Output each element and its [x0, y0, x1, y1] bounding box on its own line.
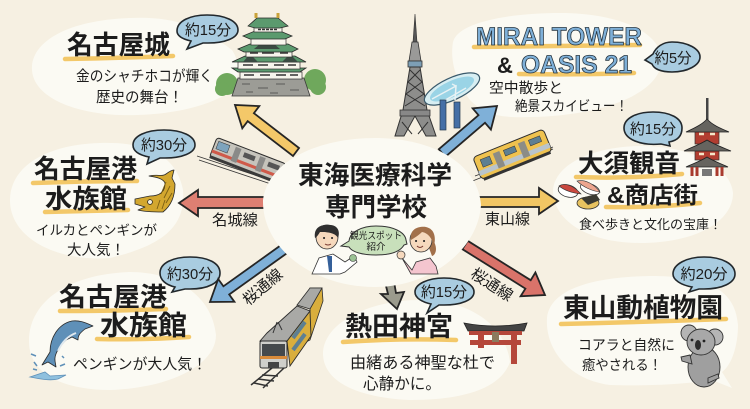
- arrow: to aquarium upper: [179, 190, 272, 216]
- arrow: to aquarium lower: [210, 243, 290, 302]
- text: Higashiyama description: [578, 337, 675, 373]
- heading: school name: 東海医療科学: [298, 161, 452, 190]
- heading: school name: [298, 161, 452, 222]
- callout: travel time 30 min: [133, 130, 195, 164]
- heading: Osu Kannon: 大須観音: [578, 150, 680, 178]
- icon: golden shachihoko: [135, 170, 175, 212]
- text: Higashiyama description: コアラと自然に: [578, 337, 675, 353]
- icon: Nagoya Castle: [215, 13, 326, 96]
- text: Higashiyama description: 癒やされる！: [582, 357, 662, 373]
- text: aquarium description: 大人気！: [67, 242, 125, 259]
- text: Atsuta description: [350, 354, 495, 393]
- callout: travel time 15 min Atsuta: 約15分: [421, 284, 467, 301]
- heading: Nagoya Port Aquarium lower: 名古屋港: [59, 282, 167, 312]
- blob: Osu background: [553, 146, 733, 243]
- text: Nagoya Castle description: [76, 68, 213, 106]
- blob: Higashiyama background: [547, 276, 738, 388]
- arrow: to Higashiyama: [462, 241, 545, 296]
- heading: Nagoya Port Aquarium: 名古屋港: [34, 154, 137, 184]
- text: aquarium description: イルカとペンギンが: [36, 223, 157, 238]
- heading: Nagoya Port Aquarium lower: 水族館: [100, 311, 187, 341]
- train: yellow subway train: [470, 129, 553, 182]
- text: Nagoya Castle description: 歴史の舞台！: [96, 89, 183, 106]
- text: Osu description: 食べ歩きと文化の宝庫！: [579, 217, 722, 232]
- callout: sightseeing spots intro: [341, 226, 407, 255]
- heading: Higashiyama Zoo: 東山動植物園: [563, 293, 723, 323]
- arrow: to Atsuta: [381, 276, 404, 309]
- callout: travel time 15 min: [177, 15, 238, 49]
- panel: Mirai Tower and Oasis 21: [395, 13, 700, 136]
- label: Sakura-dori line left: 桜通線: [239, 265, 287, 309]
- train: grey and red commuter train: [197, 137, 286, 187]
- panel: Nagoya Castle: [32, 13, 326, 115]
- blob: Nagoya Castle background: [32, 18, 238, 115]
- callout: travel time 5 min: 約5分: [654, 50, 692, 67]
- heading: Nagoya Port Aquarium lower: [59, 282, 189, 341]
- arrow: to Mirai Tower: [439, 106, 497, 157]
- text: Mirai description: [489, 80, 628, 114]
- callout: travel time 20 min: [673, 257, 735, 292]
- heading: school name: 専門学校: [325, 193, 427, 222]
- callout: travel time 15 min Osu: [624, 112, 682, 146]
- callout: travel time 15 min Osu: 約15分: [630, 121, 676, 138]
- heading: Mirai Tower and Oasis 21: OASIS 21: [521, 51, 632, 79]
- callout: sightseeing spots intro: 観光スポット: [350, 230, 402, 242]
- icon: Oasis 21: [420, 66, 484, 130]
- heading: Osu Kannon: [576, 150, 700, 208]
- label: Higashiyama line: 東山線: [485, 211, 530, 228]
- callout: travel time 20 min: 約20分: [680, 266, 728, 283]
- icon: torii gate: [464, 323, 527, 364]
- blob: Mirai Tower background: [452, 13, 662, 117]
- icon: sushi: [557, 181, 601, 209]
- panel: Osu Kannon and shopping street: [553, 98, 733, 243]
- panel: Nagoya Port Aquarium lower: [29, 257, 220, 390]
- panel: Higashiyama Zoo: [547, 257, 738, 388]
- text: lower aquarium description: ペンギンが大人気！: [73, 356, 207, 373]
- label: Meijo line: 名城線: [212, 212, 258, 229]
- blob: lower aquarium background: [29, 272, 216, 390]
- text: Atsuta description: 由緒ある神聖な杜で: [350, 354, 495, 372]
- heading: Mirai Tower and Oasis 21: &: [497, 53, 513, 78]
- text: Mirai description: 絶景スカイビュー！: [515, 98, 628, 114]
- heading: Mirai Tower and Oasis 21: [474, 23, 642, 79]
- icon: nurse: [397, 227, 438, 274]
- panel: Nagoya Port Aquarium upper: [10, 130, 195, 259]
- text: aquarium description: [36, 223, 157, 259]
- icon: jumping dolphin: [30, 321, 93, 380]
- callout: travel time 30 min lower: 約30分: [167, 266, 213, 283]
- text: Atsuta description: 心静かに。: [363, 375, 441, 393]
- callout: travel time 15 min Atsuta: [415, 278, 474, 313]
- icon: koala: [681, 325, 723, 387]
- blob: aquarium background: [10, 143, 183, 258]
- blob: hub background: [263, 138, 481, 287]
- icon: five-storey pagoda: [684, 98, 731, 176]
- panel: Atsuta Shrine: [323, 278, 527, 400]
- heading: Osu Kannon: &商店街: [607, 182, 698, 208]
- callout: travel time 30 min lower: [160, 257, 220, 292]
- heading: Atsuta Shrine: 熱田神宮: [345, 312, 453, 342]
- heading: Nagoya Port Aquarium: [33, 154, 137, 214]
- icon: Mirai Tower: [395, 14, 436, 136]
- icon: doctor: [312, 225, 357, 274]
- blob: Atsuta background: [323, 300, 510, 400]
- train: front view on rails: [251, 288, 323, 388]
- callout: travel time 5 min: [645, 42, 700, 72]
- callout: travel time 15 min: 約15分: [185, 22, 231, 39]
- text: Mirai description: 空中散歩と: [489, 80, 563, 97]
- panel: central school hub: [263, 138, 481, 287]
- label: Sakura-dori line right: 桜通線: [467, 265, 517, 305]
- callout: travel time 30 min: 約30分: [141, 137, 187, 154]
- heading: Nagoya Port Aquarium: 水族館: [45, 184, 127, 214]
- heading: Nagoya Castle: 名古屋城: [67, 30, 170, 60]
- text: Nagoya Castle description: 金のシャチホコが輝く: [76, 68, 213, 85]
- heading: Mirai Tower and Oasis 21: MIRAI TOWER: [476, 23, 642, 51]
- callout: sightseeing spots intro: 紹介: [366, 241, 386, 253]
- arrow: to Nagoya Castle: [235, 105, 299, 156]
- arrow: to Osu: [470, 188, 558, 214]
